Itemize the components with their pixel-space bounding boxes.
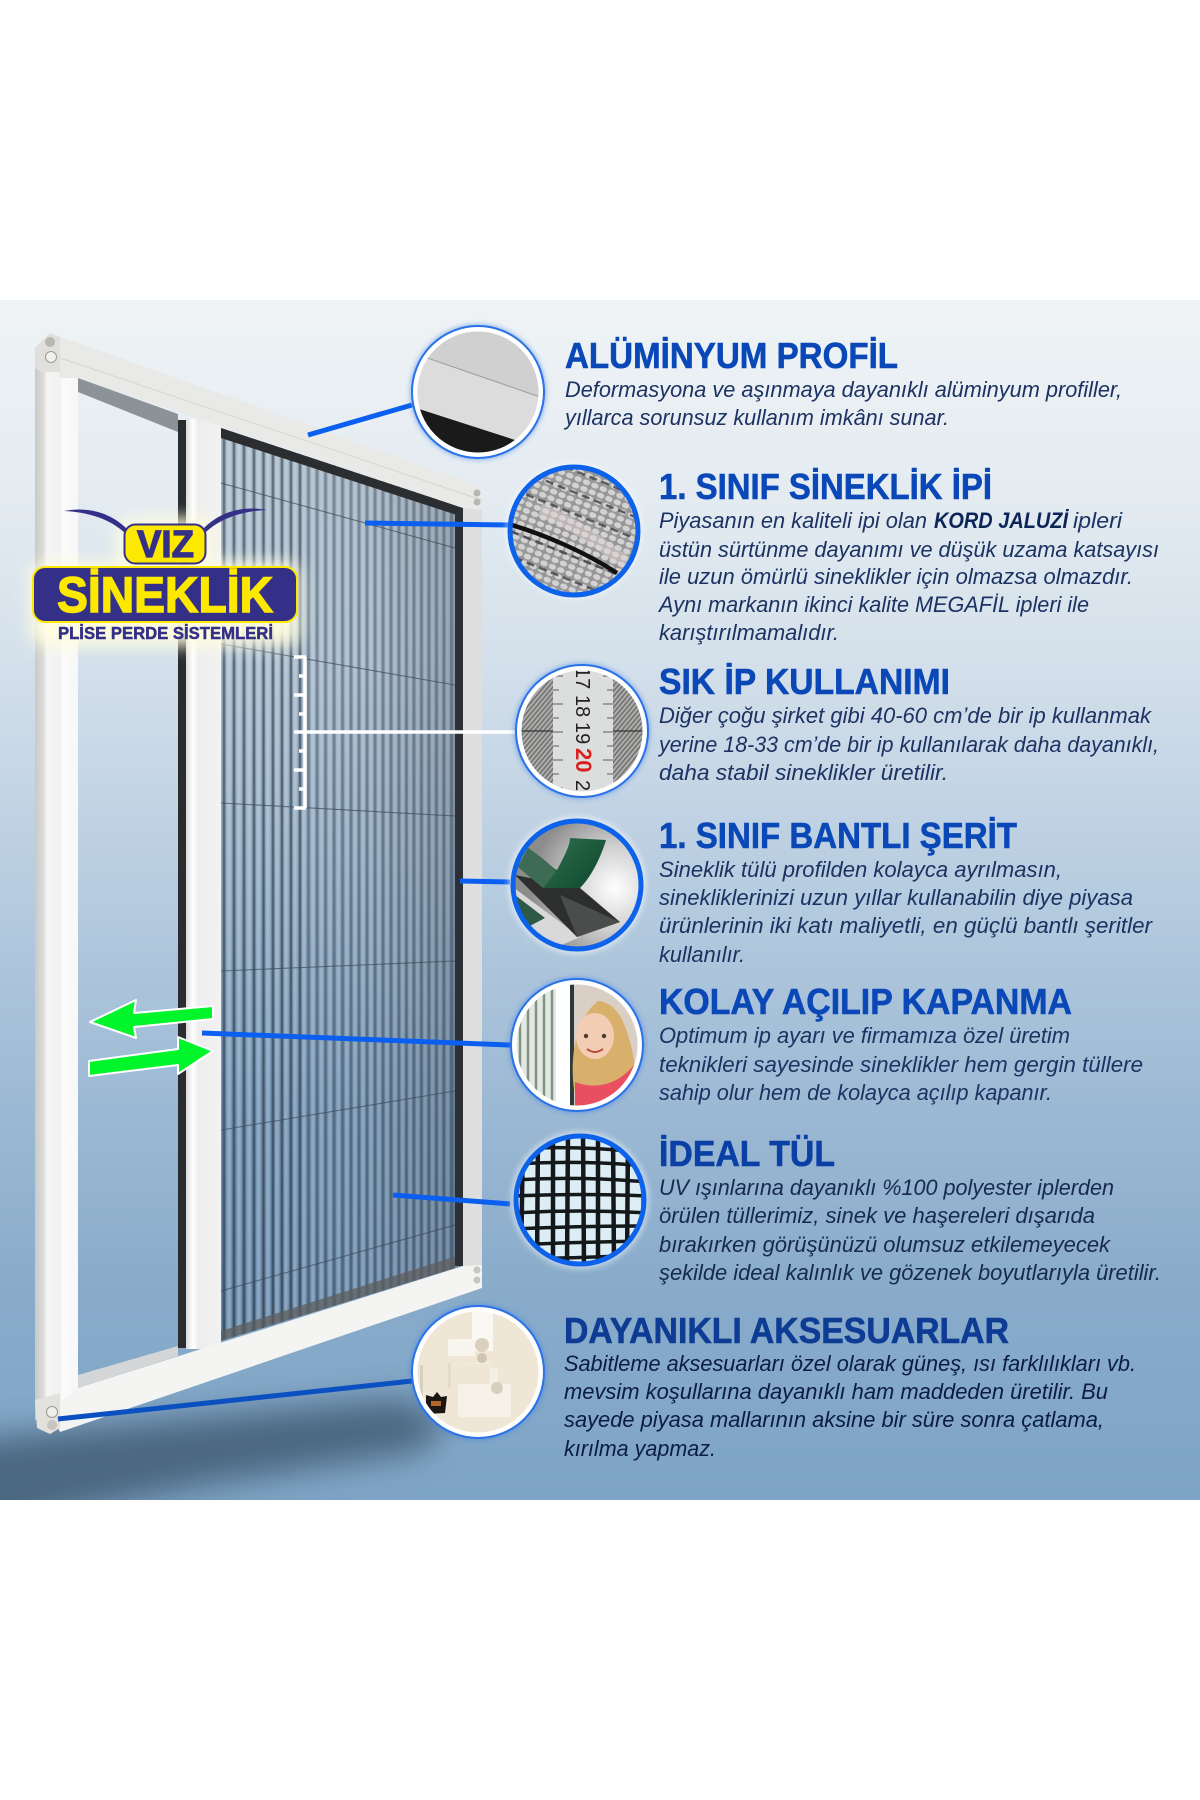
logo glow (30, 518, 300, 646)
description: Optimum ip ayarı ve firmamıza özel üretim (659, 1023, 1070, 1048)
sash (186, 419, 221, 1349)
description (657, 508, 1159, 645)
description (563, 377, 1122, 430)
panel: sık ip kullanımı (515, 661, 1159, 802)
description: bırakırken görüşünüzü olumsuz etkilemeyecek (659, 1232, 1112, 1257)
description: üstün sürtünme dayanımı ve düşük uzama katsayısı (659, 537, 1159, 562)
heading: İDEAL TÜL (659, 1133, 835, 1174)
dark side strip (178, 420, 186, 1348)
circle photo: profile (410, 325, 546, 470)
arrow left (90, 1000, 213, 1038)
description: mevsim koşullarına dayanıklı ham maddeden üretilir. Bu (564, 1379, 1108, 1404)
description: yerine 18-33 cm’de bir ip kullanılarak daha dayanıklı, (657, 732, 1159, 757)
mesh head shadow (221, 428, 463, 517)
heading: SIK İP KULLANIMI (659, 661, 950, 702)
heading: ALÜMİNYUM PROFİL (565, 335, 898, 376)
description: ile uzun ömürlü sineklikler için olmazsa olmazdır. (659, 564, 1133, 589)
description: ipleri (1073, 508, 1123, 533)
logo wings (64, 509, 267, 533)
green arrows (89, 1000, 213, 1076)
description (657, 703, 1159, 785)
description: kırılma yapmaz. (564, 1436, 716, 1461)
heading: 1. SINIF BANTLI ŞERİT (659, 815, 1017, 856)
description: teknikleri sayesinde sineklikler hem gergin tüllere (659, 1052, 1143, 1077)
circle photo: ruler: 17 (571, 667, 593, 689)
circle photo: accessories (410, 1305, 546, 1440)
description: şekilde ideal kalınlık ve gözenek boyutlarıyla üretilir. (659, 1260, 1161, 1285)
circle photo: mesh (511, 1131, 649, 1269)
connector (460, 881, 510, 882)
logo tagline: PLİSE PERDE SİSTEMLERİ (58, 623, 273, 643)
logo badge VIZ: VIZ (137, 524, 194, 566)
circle photo: ruler: 19 (571, 722, 593, 744)
description: Piyasanın en kaliteli ipi olan (659, 508, 927, 533)
top rail (50, 333, 482, 510)
circle photo: tape (508, 816, 646, 954)
heading: DAYANIKLI AKSESUARLAR (564, 1310, 1009, 1351)
bottom rail (50, 1265, 482, 1432)
connector (58, 1381, 412, 1419)
logo (30, 509, 300, 646)
circle photo: ruler: 20 (571, 748, 596, 772)
panel: alüminyum profil (308, 325, 1122, 470)
ruler marker (294, 657, 515, 808)
logo bar SİNEKLİK: SİNEKLİK (57, 567, 273, 623)
description (659, 1023, 1143, 1105)
description: KORD JALUZİ (934, 508, 1070, 533)
arrow right (89, 1037, 213, 1076)
description: sahip olur hem de kolayca açılıp kapanır. (659, 1080, 1052, 1105)
panel: bantlı şerit (460, 815, 1153, 967)
description: Deformasyona ve aşınmaya dayanıklı alüminyum profiller, (565, 377, 1122, 402)
window screen frame (35, 333, 482, 1434)
connector (308, 405, 412, 435)
description: daha stabil sineklikler üretilir. (659, 760, 948, 785)
corner caps (35, 333, 480, 1434)
description: yıllarca sorunsuz kullanım imkânı sunar. (563, 405, 949, 430)
description: Sabitleme aksesuarları özel olarak güneş, ısı farklılıkları vb. (564, 1351, 1136, 1376)
description: ürünlerinin iki katı maliyetli, en güçlü bantlı şeritler (659, 913, 1153, 938)
circle photo: ruler (515, 664, 649, 802)
description: karıştırılmamalıdır. (659, 620, 839, 645)
opening lower strip (78, 1346, 178, 1388)
connector (365, 523, 510, 525)
description: sinekliklerinizi uzun yıllar kullanabilin diye piyasa (659, 885, 1133, 910)
description: Aynı markanın ikinci kalite MEGAFİL ipleri ile (657, 592, 1089, 617)
heading: KOLAY AÇILIP KAPANMA (659, 981, 1072, 1022)
heading: 1. SINIF SİNEKLİK İPİ (659, 466, 992, 507)
circle photo: girl (510, 978, 644, 1112)
opening shadow (78, 378, 178, 432)
description: sayede piyasa mallarının aksine bir süre sonra çatlama, (564, 1407, 1104, 1432)
description (659, 857, 1153, 967)
connector (393, 1195, 510, 1204)
connector (202, 1033, 510, 1045)
panel: dayanıklı aksesuarlar (58, 1305, 1136, 1461)
circle photo: cord (502, 464, 642, 600)
circle photo: ruler: 21 (571, 780, 593, 802)
panel: kolay açılıp kapanma (202, 978, 1143, 1112)
description: örülen tüllerimiz, sinek ve haşereleri dışarıda (659, 1203, 1095, 1228)
mesh panel (221, 420, 463, 1350)
right stile (463, 490, 482, 1285)
panel: sineklik ipi (364, 464, 1158, 644)
description (659, 1175, 1161, 1285)
description: Sineklik tülü profilden kolayca ayrılmasın, (659, 857, 1062, 882)
panel: ideal tül (393, 1131, 1161, 1285)
description: UV ışınlarına dayanıklı %100 polyester iplerden (659, 1175, 1114, 1200)
background band (0, 300, 1200, 1560)
description: Diğer çoğu şirket gibi 40-60 cm’de bir ip kullanmak (659, 703, 1153, 728)
left stile (35, 348, 78, 1420)
description: kullanılır. (659, 942, 745, 967)
circle photo: ruler: 18 (571, 695, 593, 717)
description (564, 1351, 1136, 1461)
